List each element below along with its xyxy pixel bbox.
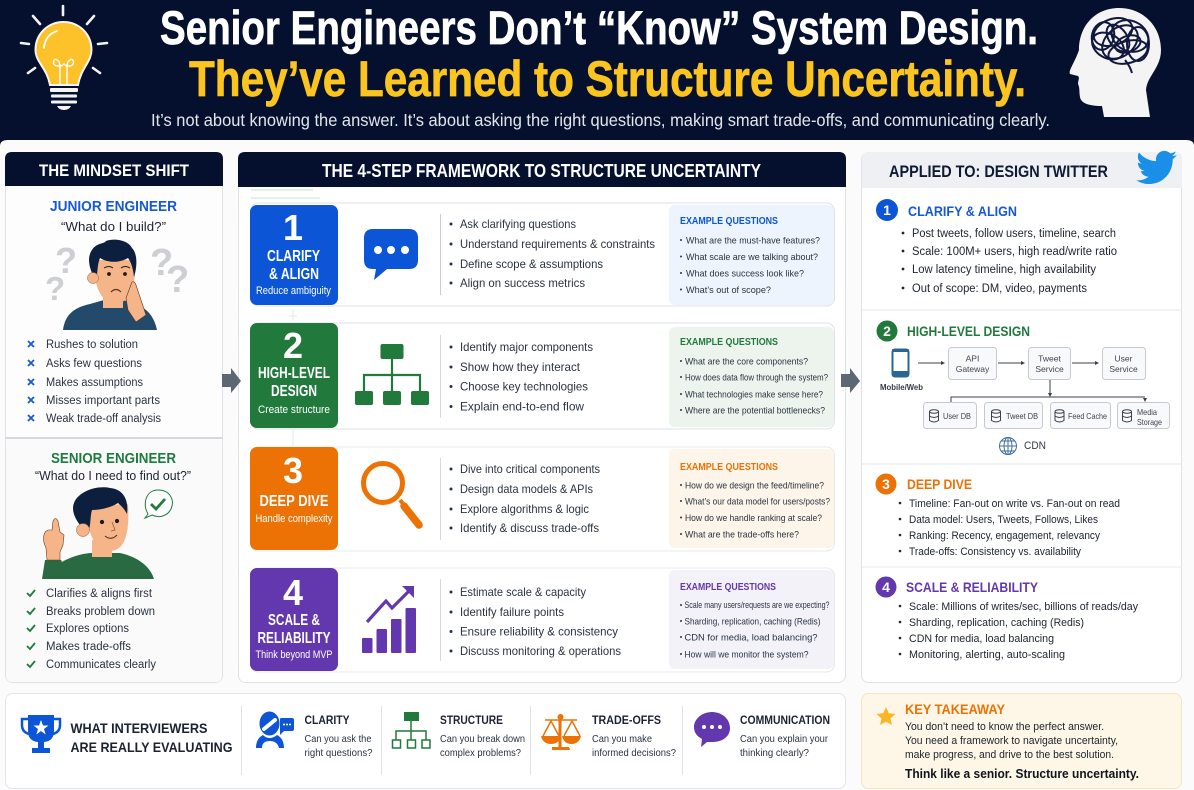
arrow: mindset to framework	[222, 368, 241, 393]
architecture diagram: User DB	[943, 411, 971, 421]
step 1 example questions	[669, 205, 834, 305]
title line 2: They’ve Learned to Structure Uncertainty.	[189, 51, 1026, 107]
criterion: trade-offs: TRADE-OFFS	[592, 713, 661, 727]
step 4 example questions: EXAMPLE QUESTIONS	[680, 581, 776, 593]
step 4 actions: Estimate scale & capacity	[460, 585, 586, 599]
step 2 example questions: What are the core components?	[685, 356, 808, 368]
senior traits list: Explores options	[46, 623, 129, 635]
step 1 example questions: What are the must-have features?	[686, 236, 820, 246]
architecture diagram: Mobile/Web	[880, 382, 923, 392]
takeaway text: make progress, and drive to the best solution.	[905, 749, 1114, 761]
architecture diagram: Storage	[1137, 417, 1162, 427]
section: scale and reliability: SCALE & RELIABILITY	[906, 579, 1039, 595]
senior engineer block: “What do I need to find out?”	[35, 468, 191, 483]
section: clarify and align: Scale: 100M+ users, high read/write ratio	[912, 246, 1117, 258]
senior traits list: Clarifies & aligns first	[46, 588, 153, 600]
step 1 actions	[450, 217, 655, 290]
icon: chat bubble	[364, 229, 418, 280]
panel header	[5, 152, 223, 186]
section: scale and reliability: CDN for media, load balancing	[909, 633, 1054, 645]
step 3 actions: Design data models & APIs	[460, 482, 593, 496]
criterion: structure: STRUCTURE	[440, 713, 503, 727]
step 2 badge: HIGH-LEVEL	[258, 365, 330, 382]
step 4 example questions: How will we monitor the system?	[684, 650, 808, 660]
section: deep dive: Timeline: Fan-out on write vs. Fan-out on read	[909, 498, 1120, 510]
icon: globe	[1000, 438, 1016, 454]
step 1 badge: CLARIFY	[267, 248, 321, 265]
subtitle: It’s not about knowing the answer. It’s about asking the right questions, making smart trade-offs, and communicating clearly.	[151, 110, 1050, 130]
step 2 badge: Create structure	[258, 404, 330, 416]
architecture diagram: User	[1115, 354, 1133, 364]
step 2 example questions	[669, 327, 834, 427]
panel header	[862, 152, 1182, 188]
criterion: structure: complex problems?	[440, 747, 521, 759]
step 3 example questions: How do we handle ranking at scale?	[685, 513, 822, 524]
criterion: clarity	[256, 712, 373, 759]
junior engineer block	[28, 199, 189, 425]
step 4 example questions: Sharding, replication, caching (Redis)	[684, 616, 820, 628]
section: scale and reliability: 4	[882, 579, 890, 595]
section: high-level design	[876, 320, 1170, 454]
step 2 badge: DESIGN	[271, 383, 317, 400]
senior engineer block: SENIOR ENGINEER	[51, 451, 176, 467]
step 2 actions: Identify major components	[460, 340, 593, 354]
step 3 example questions: How do we design the feed/timeline?	[685, 480, 824, 492]
step 4 badge: SCALE &	[268, 612, 320, 629]
senior engineer block	[5, 437, 223, 682]
takeaway text: You don’t need to know the perfect answer.	[905, 721, 1104, 733]
section: clarify and align: Low latency timeline, high availability	[912, 264, 1096, 276]
section: scale and reliability: Monitoring, alerting, auto-scaling	[909, 649, 1065, 661]
step 3 badge: Handle complexity	[256, 513, 333, 525]
step 3 badge	[250, 447, 338, 550]
architecture diagram: Tweet	[1038, 354, 1061, 364]
step 1 badge	[250, 205, 338, 305]
step 4 actions: Discuss monitoring & operations	[460, 644, 621, 658]
step 4 actions	[450, 585, 621, 658]
takeaway text	[905, 702, 1139, 781]
criterion: structure	[392, 712, 525, 759]
section: deep dive: Ranking: Recency, engagement, relevancy	[909, 530, 1100, 542]
icon: star	[876, 707, 896, 725]
architecture diagram	[880, 348, 1170, 454]
criterion: communication	[694, 712, 830, 759]
step 3 badge: DEEP DIVE	[260, 493, 328, 510]
illustration: confident senior	[42, 487, 172, 579]
illustration: confused junior: ?	[166, 259, 189, 301]
panel header: APPLIED TO: DESIGN TWITTER	[889, 163, 1108, 181]
header banner	[0, 0, 1194, 146]
step 3 example questions: What’s our data model for users/posts?	[685, 496, 830, 508]
step 1 actions: Define scope & assumptions	[460, 257, 603, 271]
step 1 card	[250, 203, 834, 306]
criterion: trade-offs: Can you make	[592, 733, 652, 745]
step 1 actions: Understand requirements & constraints	[460, 237, 655, 251]
section: clarify and align: CLARIFY & ALIGN	[908, 203, 1017, 219]
step 3 actions: Identify & discuss trade-offs	[460, 521, 599, 535]
step 2 actions: Explain end-to-end flow	[460, 400, 584, 414]
step 4 actions: Ensure reliability & consistency	[460, 624, 618, 638]
junior traits list: Misses important parts	[46, 395, 160, 407]
architecture diagram: Service	[1035, 364, 1064, 374]
step 1 example questions: What’s out of scope?	[686, 285, 771, 296]
criterion: structure: Can you break down	[440, 733, 525, 745]
step 2 example questions: What technologies make sense here?	[685, 390, 823, 400]
takeaway text: KEY TAKEAWAY	[905, 702, 1005, 717]
section: deep dive: DEEP DIVE	[907, 476, 972, 492]
icon: balance scale	[541, 714, 581, 750]
section: high-level design: 2	[883, 323, 891, 339]
icon: org chart	[392, 712, 430, 748]
section: clarify and align	[876, 199, 1117, 295]
section: deep dive	[876, 474, 1120, 558]
step 3 card	[250, 447, 834, 551]
architecture diagram: Service	[1109, 364, 1138, 374]
step 4 actions: Identify failure points	[460, 605, 564, 619]
arrow: framework to applied example	[841, 368, 860, 393]
panel: what interviewers evaluate	[6, 694, 846, 788]
icon: trophy	[22, 715, 60, 753]
senior traits list: Communicates clearly	[46, 659, 156, 671]
icon: speech bubble check	[145, 490, 172, 518]
step 2 example questions: Where are the potential bottlenecks?	[685, 406, 825, 416]
step 4 badge: Think beyond MVP	[256, 649, 332, 661]
architecture diagram: Tweet DB	[1006, 411, 1038, 421]
step 4 example questions: CDN for media, load balancing?	[684, 632, 818, 644]
junior traits list: Makes assumptions	[46, 377, 143, 389]
icon: head with tangled brain	[1070, 8, 1161, 117]
step 2 badge: 2	[283, 325, 303, 366]
section: scale and reliability: Sharding, replication, caching (Redis)	[909, 617, 1084, 629]
icon: twitter bird	[1136, 151, 1177, 184]
section: scale and reliability	[876, 576, 1138, 661]
criterion: communication: COMMUNICATION	[740, 713, 830, 727]
criterion: trade-offs	[541, 713, 676, 759]
panel header	[238, 152, 846, 187]
criterion: communication: thinking clearly?	[740, 747, 809, 759]
architecture diagram: API	[966, 354, 979, 364]
step 4 card	[250, 568, 834, 672]
junior traits list: Rushes to solution	[46, 339, 138, 351]
step 2 badge	[250, 323, 338, 428]
junior traits list: Weak trade-off analysis	[46, 413, 161, 425]
step 1 example questions: What does success look like?	[686, 268, 804, 280]
step 2 example questions: How does data flow through the system?	[685, 372, 828, 384]
panel: key takeaway	[862, 694, 1182, 788]
step 1 badge: & ALIGN	[269, 266, 319, 283]
panel header: THE MINDSET SHIFT	[39, 161, 190, 180]
evaluation heading: ARE REALLY EVALUATING	[70, 739, 233, 755]
criterion: clarity: right questions?	[304, 747, 373, 759]
junior engineer block: “What do I build?”	[61, 219, 166, 234]
junior traits list: Asks few questions	[46, 358, 142, 370]
architecture diagram: Media	[1137, 407, 1157, 417]
icon: magnifying glass	[364, 464, 419, 525]
criterion: communication: Can you explain your	[740, 733, 828, 745]
section: high-level design: HIGH-LEVEL DESIGN	[907, 323, 1030, 339]
step 2 actions: Show how they interact	[460, 360, 581, 374]
step 4 example questions	[669, 570, 834, 669]
junior engineer block: JUNIOR ENGINEER	[50, 199, 177, 215]
takeaway text: Think like a senior. Structure uncertainty.	[905, 766, 1139, 781]
step 1 example questions: EXAMPLE QUESTIONS	[680, 215, 778, 227]
illustration: confused junior	[45, 240, 189, 330]
step 1 badge: 1	[283, 207, 303, 248]
step 3 badge: 3	[283, 450, 303, 491]
evaluation heading: WHAT INTERVIEWERS	[70, 720, 208, 736]
panel: the mindset shift	[5, 152, 223, 682]
icon: person with speech	[256, 712, 294, 748]
icon: growth chart	[362, 586, 416, 653]
step 2 actions: Choose key technologies	[460, 380, 588, 394]
section: deep dive: Data model: Users, Tweets, Follows, Likes	[909, 514, 1098, 526]
step 4 badge: 4	[283, 572, 303, 613]
step 2 example questions: EXAMPLE QUESTIONS	[680, 336, 778, 348]
criterion: clarity: CLARITY	[304, 713, 350, 727]
evaluation heading	[70, 720, 233, 755]
architecture diagram: Feed Cache	[1068, 411, 1107, 421]
icon: phone	[892, 349, 909, 377]
criterion: clarity: Can you ask the	[304, 733, 372, 745]
step 3 actions: Explore algorithms & logic	[460, 502, 589, 516]
illustration: confused junior: ?	[55, 240, 77, 281]
section: deep dive: Trade-offs: Consistency vs. availability	[909, 546, 1081, 558]
panel: applied to design twitter	[862, 151, 1182, 682]
section: deep dive: 3	[882, 476, 890, 492]
icon: light bulb	[21, 6, 107, 110]
architecture diagram: Gateway	[956, 364, 990, 374]
section: clarify and align: Out of scope: DM, video, payments	[912, 283, 1087, 295]
icon: speech bubble	[694, 712, 730, 747]
architecture diagram: CDN	[1024, 440, 1046, 452]
step 3 example questions: What are the trade-offs here?	[685, 530, 799, 540]
senior traits list	[27, 588, 156, 671]
illustration: confused junior: ?	[150, 242, 173, 284]
illustration: confused junior: ?	[45, 270, 65, 307]
panel header: THE 4-STEP FRAMEWORK TO STRUCTURE UNCERTAINTY	[322, 161, 761, 181]
step 2 actions	[450, 340, 593, 414]
step 1 actions: Align on success metrics	[460, 276, 585, 290]
panel: 4-step framework	[238, 152, 846, 682]
step 3 actions: Dive into critical components	[460, 462, 600, 476]
senior traits list: Breaks problem down	[46, 606, 155, 618]
step 4 example questions: Scale many users/requests are we expecting?	[684, 600, 830, 611]
step 3 actions	[450, 462, 600, 535]
step 3 example questions: EXAMPLE QUESTIONS	[680, 461, 778, 473]
step 1 badge: Reduce ambiguity	[256, 285, 331, 297]
step 4 badge	[250, 568, 338, 671]
takeaway text: You need a framework to navigate uncertainty,	[905, 735, 1118, 747]
step 4 badge: RELIABILITY	[258, 630, 331, 647]
senior traits list: Makes trade-offs	[46, 641, 131, 653]
icon: hierarchy	[355, 344, 429, 405]
section: clarify and align: Post tweets, follow users, timeline, search	[912, 228, 1116, 240]
step 2 card	[250, 323, 834, 429]
junior traits list	[28, 339, 161, 425]
section: clarify and align: 1	[883, 202, 891, 218]
step 1 example questions: What scale are we talking about?	[686, 252, 818, 263]
criterion: trade-offs: informed decisions?	[592, 747, 676, 759]
step 3 example questions	[669, 449, 834, 548]
step 1 actions: Ask clarifying questions	[460, 217, 576, 231]
section: scale and reliability: Scale: Millions of writes/sec, billions of reads/day	[909, 601, 1138, 613]
